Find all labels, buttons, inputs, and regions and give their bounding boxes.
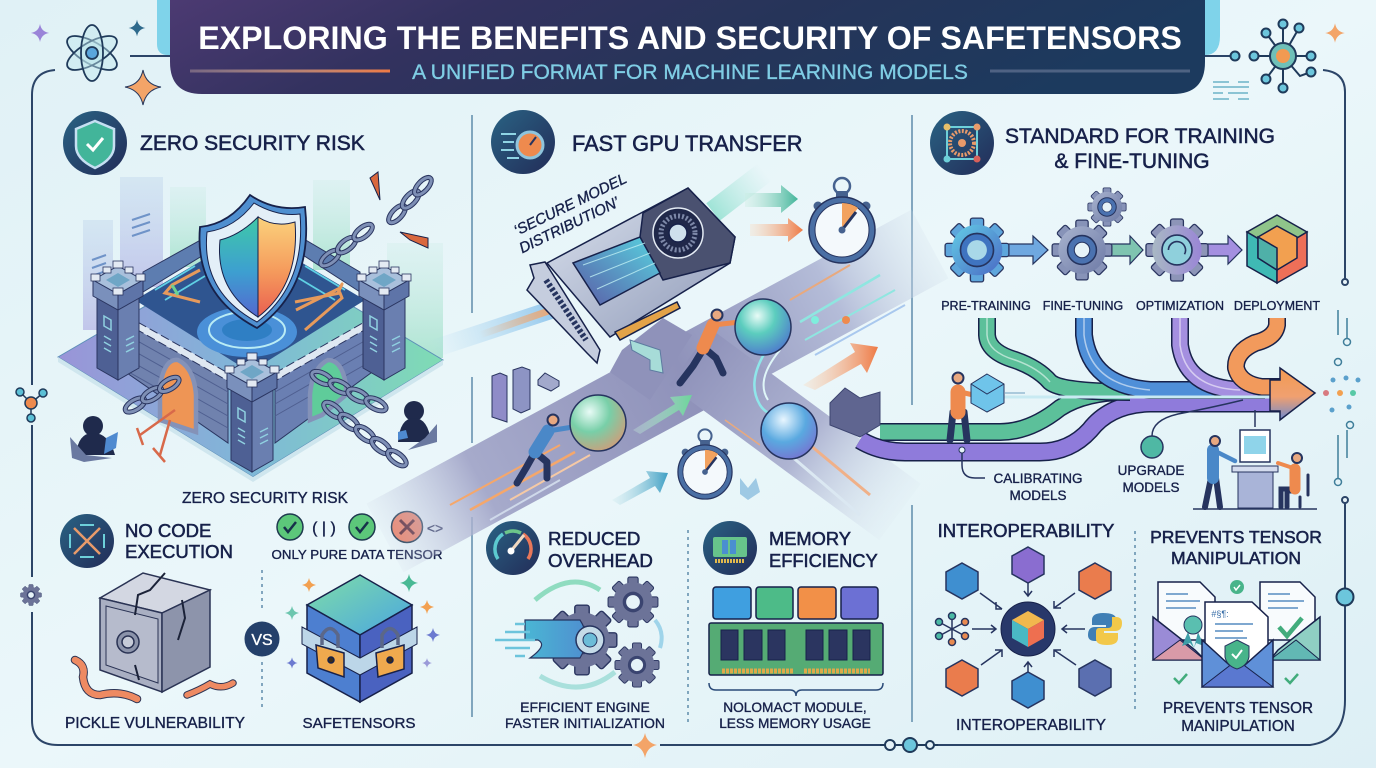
heading: MEMORY xyxy=(769,528,851,549)
panel: zero security risk xyxy=(58,111,443,507)
icon: python xyxy=(1088,613,1122,645)
engine gears xyxy=(495,577,662,687)
decorative icon: atom xyxy=(62,25,122,81)
subtitle xyxy=(190,61,1190,84)
decorative data lines xyxy=(1213,82,1249,99)
network node xyxy=(936,612,968,646)
icon: workflow xyxy=(930,111,994,175)
heading: ZERO SECURITY RISK xyxy=(140,132,365,155)
icon: worms xyxy=(75,660,233,699)
castle fortress xyxy=(58,232,443,482)
hacker right xyxy=(398,401,437,450)
callout: calibrating models: MODELS xyxy=(1009,488,1067,503)
vs badge: VS xyxy=(251,632,273,649)
hero shield xyxy=(199,195,306,328)
bottom frame ornament xyxy=(633,733,938,758)
caption: PREVENTS TENSOR xyxy=(1163,700,1313,717)
icon: cracked safe xyxy=(100,573,210,692)
sparkles around cube xyxy=(285,574,440,669)
document centre xyxy=(1205,602,1268,665)
heading: INTEROPERABILITY xyxy=(938,520,1114,541)
broken chain top xyxy=(318,221,375,269)
central cube xyxy=(1001,602,1055,656)
chain debris xyxy=(370,172,428,248)
right dotted trail xyxy=(1323,310,1360,486)
pure data icons xyxy=(277,512,443,542)
broken chain lower left xyxy=(123,374,181,415)
connector arrows xyxy=(972,583,1085,672)
person with cube xyxy=(950,372,978,440)
panel: reduced overhead xyxy=(486,521,665,731)
broken chain top end xyxy=(386,175,434,225)
caption: NOLOMACT MODULE, xyxy=(723,700,867,715)
caption: FASTER INITIALIZATION xyxy=(505,715,665,731)
front wall left xyxy=(127,316,228,443)
stopwatch lower xyxy=(678,429,732,499)
heading: STANDARD FOR TRAINING xyxy=(1005,125,1275,148)
seal badge xyxy=(1182,616,1204,648)
top check xyxy=(1230,580,1244,594)
heading: PREVENTS TENSOR xyxy=(1150,527,1322,547)
caption: INTEROPERABILITY xyxy=(956,717,1107,734)
stage labels xyxy=(941,299,1320,313)
icon: locked safetensors cube xyxy=(302,575,417,702)
castle floor xyxy=(135,232,365,372)
block at road end xyxy=(830,388,880,437)
panel: fast gpu transfer xyxy=(385,110,930,538)
front wall right xyxy=(275,316,375,443)
callout: calibrating models xyxy=(959,447,1083,503)
deployment cube xyxy=(1247,215,1307,283)
document centre: #§¶: xyxy=(1211,609,1229,619)
decorative icon: network xyxy=(1230,20,1316,92)
workflow arrows xyxy=(1005,236,1242,264)
background data towers xyxy=(83,177,443,358)
pure data icons: <> xyxy=(427,520,443,536)
envelope right xyxy=(1270,617,1320,660)
caption: safetensors: SAFETENSORS xyxy=(302,715,416,732)
people at workstation xyxy=(1193,410,1317,509)
icon: memory chip xyxy=(703,521,757,575)
large check xyxy=(1279,618,1302,636)
caption: EFFICIENT ENGINE xyxy=(520,699,650,715)
heading: EFFICIENCY xyxy=(769,550,878,571)
envelope centre xyxy=(1202,640,1273,687)
held cube xyxy=(971,374,1025,412)
ram module xyxy=(709,623,883,675)
small gear on frame xyxy=(21,585,41,605)
brace xyxy=(709,683,883,696)
cyan layers behind banner xyxy=(157,0,1220,55)
main title: EXPLORING THE BENEFITS AND SECURITY OF SAFETENSORS xyxy=(198,20,1182,56)
stage labels: FINE-TUNING xyxy=(1043,299,1123,313)
heading: & FINE-TUNING xyxy=(1054,150,1210,173)
document left xyxy=(1158,582,1215,640)
caption: LESS MEMORY USAGE xyxy=(719,716,871,731)
callout: calibrating models: CALIBRATING xyxy=(993,471,1083,486)
callout: upgrade models: MODELS xyxy=(1122,480,1180,495)
flow streams xyxy=(860,318,1290,452)
caption: MANIPULATION xyxy=(1181,718,1295,735)
small checks xyxy=(1174,674,1298,683)
icon: gauge xyxy=(486,521,540,575)
icon: stopwatch badge xyxy=(491,110,555,174)
server blocks xyxy=(492,367,559,422)
framework nodes xyxy=(946,547,1111,708)
heading: REDUCED xyxy=(548,528,640,549)
optimization gear xyxy=(1146,219,1208,281)
stage labels: OPTIMIZATION xyxy=(1136,299,1224,313)
speed arrows xyxy=(612,185,878,505)
heading: OVERHEAD xyxy=(548,550,653,571)
document right xyxy=(1260,582,1315,640)
back walls xyxy=(143,232,360,292)
pre-training gear xyxy=(945,218,1009,282)
panel: interoperability xyxy=(936,520,1122,734)
memory blocks xyxy=(713,587,878,619)
decorative sparkle stars xyxy=(31,20,1345,105)
panel: no code execution xyxy=(60,512,443,732)
red attack arrows xyxy=(137,410,175,462)
fine-tuning gear xyxy=(1052,220,1112,280)
person pushing sphere lower xyxy=(517,414,573,483)
subtitle: A UNIFIED FORMAT FOR MACHINE LEARNING MODELS xyxy=(412,61,968,84)
caption: only pure data tensor: ONLY PURE DATA TENSOR xyxy=(272,547,442,562)
callout: upgrade models xyxy=(1118,400,1243,495)
stage labels: DEPLOYMENT xyxy=(1234,299,1320,313)
gate right xyxy=(310,360,346,420)
road block xyxy=(630,340,663,373)
broken chain lower xyxy=(321,399,409,469)
vs badge xyxy=(244,622,280,656)
data sphere upper xyxy=(735,299,791,355)
heading: EXECUTION xyxy=(125,541,233,562)
heading: FAST GPU TRANSFER xyxy=(572,131,803,156)
gpu card xyxy=(527,188,735,363)
panel: memory efficiency xyxy=(703,521,883,731)
data sphere lower xyxy=(570,395,626,451)
panel: prevents tensor manipulation xyxy=(1150,527,1322,735)
rotated label: ‘SECURE MODEL xyxy=(511,170,630,240)
stopwatch upper xyxy=(809,178,875,263)
icon: code nodes xyxy=(60,514,114,568)
heading: NO CODE xyxy=(125,520,211,541)
icon: shield badge xyxy=(63,111,127,175)
stage labels: PRE-TRAINING xyxy=(941,299,1031,313)
pure data icons: ( | ) xyxy=(312,520,336,537)
title banner xyxy=(170,0,1205,94)
rotated label: DISTRIBUTION’ xyxy=(516,194,623,257)
panel dividers xyxy=(262,115,1135,725)
callout: upgrade models: UPGRADE xyxy=(1118,463,1184,478)
hacker left xyxy=(70,416,118,462)
heading: MANIPULATION xyxy=(1171,548,1301,568)
caption: pickle vulnerability: PICKLE VULNERABILITY xyxy=(65,715,245,732)
motion streaks xyxy=(430,172,905,520)
road network xyxy=(385,244,930,538)
right frame node xyxy=(1336,588,1354,606)
left side node icon xyxy=(16,388,47,422)
castle base platform xyxy=(58,245,443,477)
output arrow head xyxy=(1270,368,1315,420)
panel: standard for training xyxy=(830,111,1320,509)
top small gear xyxy=(1088,188,1126,226)
caption: ZERO SECURITY RISK xyxy=(182,490,349,507)
gate left xyxy=(160,360,196,432)
person pushing sphere upper xyxy=(680,310,740,383)
data sphere right xyxy=(761,403,817,459)
envelope left xyxy=(1153,617,1205,660)
broken chain lower right xyxy=(310,369,388,414)
